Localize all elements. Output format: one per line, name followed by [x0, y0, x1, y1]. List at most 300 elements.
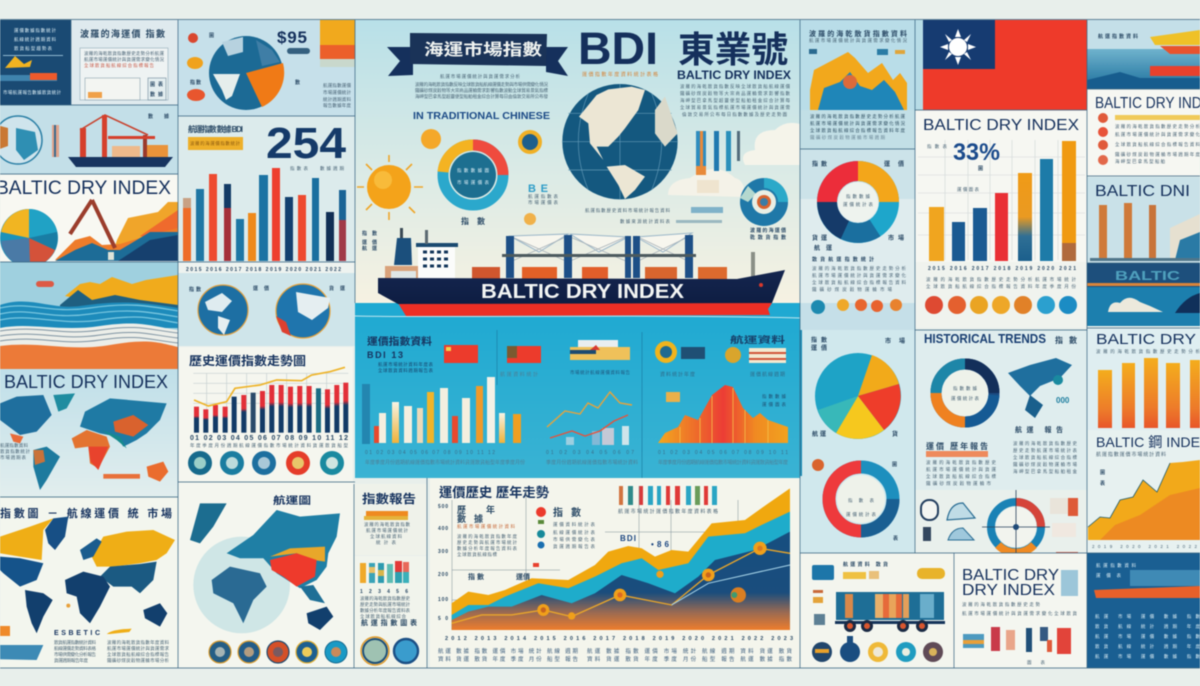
panel: small circle text card: 全球航線資料: [370, 533, 402, 540]
panel: waves and mountains: [0, 262, 178, 369]
panel: globe with orange wedge: 航運指數運價: [323, 82, 352, 89]
panel: center hero: 乾散貨指數: [750, 234, 786, 241]
panel: donut chart and icons: 運價: [884, 160, 904, 168]
panel: report text card top left: 波羅的海乾散貨指數歷史走勢分析航運: [84, 50, 164, 57]
panel: orange bars: 波羅的海乾散貨指數歷史走勢分析: [1096, 348, 1200, 355]
donut chart: 運價統計表: [951, 395, 980, 402]
panel: bar chart 254: 波羅的海運價指數統計: [190, 140, 240, 147]
icons row: [812, 636, 943, 662]
heading: HISTORICAL TRENDS: [924, 331, 1046, 346]
panel: orange bars: BALTIC DRY: [1096, 331, 1196, 348]
panel: baltic text one: 波羅的海乾散貨指數歷史走勢分析: [1115, 123, 1200, 130]
ship cranes: [502, 233, 755, 278]
panel: report text card top left: 全球散貨船航線綜合指標報告: [84, 62, 154, 69]
stacked areas: [452, 488, 790, 630]
panel: center hero: [355, 20, 800, 305]
panel: small stacked bars card: [354, 556, 427, 668]
text block: 全球散貨船航線綜合指標報告資料: [812, 279, 906, 286]
callout percentage: 33%: [953, 139, 1000, 166]
area chart: 01 02 03 04 05 06 07 08 09 10 11: [658, 450, 788, 456]
panel: large area chart: 200: [438, 572, 448, 578]
panel: pie and red blue donut: 貨: [892, 430, 898, 438]
panel: pie and red blue donut: 表: [893, 535, 898, 542]
panel: small stacked bars card: 歷史走勢與航運市場統計: [360, 601, 410, 608]
area chart: 指數數據: [762, 393, 786, 400]
panel: small circle text card: 航運市場運價統計: [366, 527, 408, 534]
text left: 波羅的海乾散貨指數歷史: [926, 459, 996, 466]
panel: report text card top left: [71, 20, 178, 105]
title ribbon: 海運市場指數: [424, 40, 542, 59]
text block under area chart: 全球散貨船航線綜合指標報告資料年度: [810, 127, 906, 134]
icon: gantry crane: [70, 200, 115, 260]
text block under area chart: 波羅的海乾散貨指數歷史走勢分析航運: [810, 113, 906, 120]
panel: historical trends: 指數: [1055, 335, 1077, 345]
panel: small stacked bars card: 航 運 指 數 圖 表: [361, 618, 417, 627]
icon: crane ship: [52, 115, 173, 167]
text lines: 波羅的海乾散貨指數歷史走勢: [962, 601, 1040, 608]
panel: sea with three charts: 資料統計年度: [660, 371, 695, 378]
small map: [1008, 358, 1072, 418]
ship containers: [472, 267, 727, 279]
panel: donut chart and icons: 航運: [814, 244, 832, 252]
gridlines: [452, 486, 790, 630]
heading: 指數圖 － 航線運價 統 市場: [0, 506, 172, 520]
panel: bar and line chart: 年度季度月份週期航線運價指數市場統計資料貨運散貨船型: [190, 442, 348, 449]
panel: sea with three charts: 01 02 03 04 05 06 07 08 09 10 11 12: [365, 450, 495, 456]
icon: target ring chart: [740, 178, 788, 226]
panel: yellow area chart right: 圖: [1100, 470, 1105, 476]
panel: center hero: 數據來源統計資料表: [620, 218, 670, 225]
panel: large area chart: 航運市場統計運價指數年度資料表格: [618, 508, 718, 515]
text right: 歷史走勢航運市場統計表: [1013, 447, 1078, 454]
panel: baltic dry index bar chart 33%: 圖: [978, 166, 983, 172]
icon: globe: [562, 84, 678, 199]
callout BE: 市場運價表: [528, 199, 558, 206]
legend and note: 數據分析年度報告資料表: [457, 545, 518, 552]
panel: yellow area chart right: 2019 2020 2021 2022: [1092, 544, 1197, 549]
panel: baltic dry index mountains: [0, 175, 178, 267]
panel: navy stats card top left: [0, 20, 71, 105]
panel: yellow and navy world map: [0, 498, 178, 668]
panel: orange bars: [1087, 328, 1200, 430]
bar chart: [362, 377, 521, 444]
text right: 海岬型巴拿馬型船舶租金: [1013, 468, 1078, 475]
text left: 運價 歷年報告: [926, 441, 988, 451]
donut chart: 運價統計表: [843, 201, 874, 208]
ship name: BALTIC DRY INDEX: [481, 281, 685, 303]
device icons: [921, 498, 1078, 553]
panel: globe and port crane: [0, 105, 178, 174]
panel: baltic text one: [1087, 90, 1200, 176]
panel: large area chart: 400: [438, 526, 448, 532]
panel: center hero: 指數: [461, 216, 485, 226]
panel: donut chart and icons: 指數: [812, 160, 827, 168]
panel: large area chart: 50: [438, 616, 448, 622]
donut chart: 指數數據圖: [457, 167, 490, 174]
panel: icons row under bars: 2015 2016 2017 2018 2019 2020 2021: [928, 266, 1076, 272]
panel: small stacked bars card: 波羅的海乾散貨指數歷史: [360, 595, 410, 602]
panel: donut chart and icons: 市場: [888, 234, 904, 242]
header icons right: 航運資料: [730, 334, 785, 345]
panel: navy table: 航運 市場 運價 數據 指數: [1095, 633, 1200, 640]
heading left: 航運市場統計資料年度表: [378, 361, 434, 368]
ship illustration: [378, 228, 785, 316]
panel: baltic blue band: [1087, 263, 1200, 326]
panel: sea with three charts: 年度季度月份週期航線運價指數市場統計資料貨運散貨船型年度季度月份: [365, 459, 525, 466]
panel: yellow area chart right: [1087, 430, 1200, 553]
panel: baltic dry index text card: 航運市場運價統計與貨運需求變化全球散貨: [962, 610, 1078, 617]
panel: large area chart: 300: [438, 549, 448, 555]
panel: baltic dry index text card: DRY INDEX: [962, 582, 1055, 599]
x axis labels: 資料 貨運 散貨 年度 季度 月份 船型 報告 航運 數據 指數: [587, 655, 792, 663]
icons row: [811, 299, 902, 314]
text right: 航運 報告: [1015, 425, 1063, 434]
donut chart: 指數數據: [953, 385, 978, 392]
panel: baltic dry index bar chart 33%: 指數表: [927, 143, 948, 150]
text block right: 倫敦交易所公布每日指數數據及歷史走勢圖: [682, 111, 788, 118]
panel: baltic towers: [1087, 177, 1200, 263]
x axis labels: 2012 2013 2014 2015 2016 2017 2018 2019 2020 2021 2022 2023: [445, 636, 793, 642]
panel: globe with orange wedge: [178, 20, 355, 116]
panel: small stacked bars card: 1 2 3 4 5 6: [360, 589, 408, 595]
text block under area chart: 航運市場運價統計與貨運需求變化情況: [810, 120, 906, 127]
globe pie: [209, 36, 284, 110]
legend and note: 波羅的海乾散貨指數年度: [457, 533, 518, 540]
legend and note: [457, 504, 596, 558]
title chinese: 東業號: [678, 29, 788, 70]
panel: globe with orange wedge: 指數: [190, 79, 201, 86]
panel: small circle text card: 統計表: [376, 539, 396, 546]
text right: [1013, 425, 1078, 475]
stacked bars: [360, 561, 409, 583]
heading left: 運價指數資料: [367, 335, 432, 348]
text block: 貨運週期報告年度: [54, 657, 88, 664]
legend and note: 指數: [553, 506, 581, 519]
panel: donut chart and icons: [800, 149, 915, 330]
ship superstructure: [385, 228, 458, 279]
panel: yellow area chart top: [800, 20, 915, 110]
text left: [926, 441, 996, 487]
legend and note: 全球散貨航線指標: [457, 551, 498, 558]
panel: baltic dry index colored world map: 航運指數資料: [0, 442, 28, 449]
panel: pie and red blue donut: 市場: [885, 337, 905, 345]
donut chart: 運價統計表: [846, 511, 876, 518]
panel: small stacked bars card: 數據分析年度報告資料表: [360, 607, 410, 614]
line chart: 01 02 03 04 05 06 07: [546, 450, 634, 456]
heading: BALTIC DRY INDEX: [0, 178, 171, 199]
heading: 航運圖: [273, 494, 311, 507]
value callouts: BDI: [620, 534, 636, 543]
panel: globe and port crane: 數據: [148, 113, 169, 120]
panel: baltic dry index bar chart 33%: [915, 111, 1087, 262]
panel: navy table: 航運指數資料: [1096, 562, 1136, 569]
panel: orange gradient image: [320, 20, 355, 67]
text block left: 航運市場運價統計與貨運需求分析: [440, 73, 520, 80]
panel: report text card top left: 數據: [150, 91, 163, 98]
area chart: 年度季度月份週期航線運價指數市場統計資料貨運散貨船型年度: [658, 459, 788, 466]
panel: baltic text one: 海岬型巴拿馬型船舶: [1115, 158, 1166, 165]
text block: 波羅的海乾散貨指數年度資料: [107, 639, 170, 646]
panel: two globes: 貨運: [329, 285, 345, 292]
value callouts: 指數: [468, 572, 484, 581]
small bars and cloud: [668, 123, 800, 197]
value callouts: [468, 534, 670, 581]
panel: center hero: 運價: [362, 239, 377, 246]
panel: yellow area chart top: 波羅的海乾散貨指數資料: [809, 29, 907, 38]
legend and note: 運價資料統計表: [553, 521, 596, 528]
value callouts: •86: [651, 540, 670, 549]
panel: globe with orange wedge: 數: [295, 79, 300, 86]
donut chart: [936, 364, 994, 422]
text block: 散貨航運指數統計: [812, 256, 874, 263]
donut chart: [443, 145, 503, 205]
text block: 航運市場運價統計與貨運需求變化: [812, 272, 906, 279]
panel: center hero: 指數: [362, 230, 377, 237]
panel: navy table: 散貨 航線 統計 週期 年度: [1095, 623, 1200, 630]
panel: large area chart: 100: [438, 597, 448, 603]
bars: [183, 168, 346, 261]
panel: navy stats card top left: 航線統計週期資料: [14, 36, 56, 43]
panel: bar chart 254: [178, 116, 355, 262]
icons row: [209, 641, 347, 663]
line chart: 季度月份週期航線運價指數市場統計資料: [546, 459, 638, 466]
text block: 散貨航運指數統計資料: [54, 639, 96, 646]
panel: large area chart: [430, 478, 800, 668]
panel: navy table: 散貨 航線 統計 週期 年度: [1095, 643, 1200, 650]
panel: pie and red blue donut: 圖: [892, 462, 897, 468]
icon: small globe: [0, 116, 42, 164]
subtitle in traditional chinese: IN TRADITIONAL CHINESE: [413, 110, 550, 122]
subtitle: BALTIC DRY INDEX: [677, 68, 791, 82]
panel: report text card top left: 波羅的海運價 指數: [80, 28, 165, 39]
title BDI: BDI: [578, 23, 658, 74]
panel: baltic dry index colored world map: 市場週期表: [0, 454, 26, 461]
text block under area chart: 鐵礦砂煤炭穀物運輸市場週期: [810, 134, 886, 141]
panel: two globes: 指數: [189, 286, 201, 293]
panel: pie and red blue donut: 運價: [811, 344, 827, 352]
text block right: 全球貿易景氣指標航運市場運價統計與貨運需: [680, 104, 790, 111]
text block: 全球散貨船航線綜合指標報告: [107, 651, 170, 658]
globe map: [190, 503, 340, 633]
panel: baltic dry index text card: 圖表: [1027, 659, 1046, 666]
panel: report text card top left: 航運市場運價統計與貨運需求變化情況: [84, 56, 164, 63]
panel: icons row under bars: 全球散貨船航線綜合指標報告資料年度季度月份: [926, 283, 1076, 290]
text right: 鐵礦砂煤炭穀物運輸市場: [1013, 461, 1078, 468]
panel: navy table: 航運 市場 運價 數據 指數: [1095, 653, 1200, 660]
icons: [361, 637, 418, 665]
text block right: 海岬型巴拿馬型超靈便型船舶租金綜合計算每: [680, 97, 790, 104]
panel: navy table: 航運 市場 運價 數據 指數: [1095, 613, 1200, 620]
donut chart: [829, 467, 893, 531]
text block left: [415, 73, 548, 100]
callout BE: 航運指數表: [528, 193, 558, 200]
text left: 鐵礦砂煤炭穀物運輸市: [926, 480, 992, 487]
x axis labels: [438, 636, 793, 663]
heading: BALTIC DRY INDEX: [923, 117, 1079, 134]
panel: target and icons: [915, 490, 1087, 556]
legend and note: 數據: [457, 513, 483, 524]
panel: sea with three charts: 市場統計航線運價資料報告: [570, 369, 630, 376]
pie chart: [0, 209, 58, 267]
panel: baltic text one: 鐵礦砂煤炭穀物運輸市場週期年度: [1115, 151, 1200, 158]
x axis labels: 航運 數據 指數 運價 市場 統計 航線 週期: [438, 647, 578, 655]
value callouts: 運價: [516, 572, 530, 581]
right column panels: [1087, 20, 1200, 668]
chart: [193, 367, 348, 433]
panel: center hero: 波羅的海運價: [750, 227, 786, 234]
icon: flag china: [444, 345, 478, 363]
panel: top yellow ship: 航運指數資料: [1098, 33, 1138, 40]
text block: 航線運價走勢資料表格: [54, 645, 96, 652]
panel: sea with three charts: 航運資料統計: [500, 371, 538, 378]
panel: asia focus globe map: [179, 482, 354, 668]
area chart: [810, 52, 907, 110]
panel: bar and line chart: 01 02 03 04 05 06 07 08 09 10 11 12: [190, 435, 348, 442]
panel: historical trends: [915, 330, 1087, 490]
heading left: 全球散貨資料週期報告表: [378, 367, 434, 374]
panel: globe with orange wedge: 統計週期資料: [323, 96, 352, 103]
mountains: [55, 202, 178, 261]
panel: taiwan flag: [915, 20, 1087, 110]
legend and note: 市場供需變化表: [553, 536, 596, 543]
world map: [0, 517, 175, 660]
panel: icons row under bars: 波羅的海乾散貨指數歷史走勢分析航運市場統計: [926, 276, 1076, 283]
panel: sea with three charts: [355, 303, 800, 478]
text block left: 鐵礦砂煤炭穀物等大宗商品運輸需求影響指數波動全球貿易景氣指標: [415, 87, 548, 94]
panel: truck: 航運資料 散貨: [843, 561, 888, 568]
text block: ESBETIC: [54, 630, 100, 637]
text left: 航運市場運價統計與貨運: [926, 466, 996, 473]
heading: 運價歷史 歷年走勢: [439, 485, 549, 500]
legend and note: 歷年: [457, 504, 495, 515]
legend and note: 航線運價統計表: [553, 529, 596, 536]
ship navy hull: [378, 270, 785, 304]
target donut: [982, 490, 1050, 556]
panel: pie and red blue donut: 航運: [812, 430, 826, 438]
panel: globe with orange wedge: 圖: [209, 33, 214, 39]
text block left: 波羅的海乾散貨指數反映全球散貨船航線運價走勢與市場供需變化情況: [415, 81, 548, 88]
callout BE: [528, 183, 558, 206]
panel: baltic text one: 航運市場運價統計與貨運需求變化: [1115, 131, 1200, 138]
panel: small circle text card: 波羅的海乾散貨指數: [364, 521, 410, 528]
text block: 市場供需變化分析報告: [54, 651, 96, 658]
panel: baltic dry index bar chart 33%: 運價圖表: [957, 186, 980, 193]
donut chart: 指數數據: [846, 193, 870, 200]
donut chart: [827, 171, 889, 233]
panel: sea with three charts: 運價航線週期: [750, 371, 785, 378]
panel: pie and red blue donut: [800, 330, 915, 553]
text left: 全球散貨船航線綜合指標: [926, 473, 996, 480]
icon: sun: [357, 155, 423, 220]
panel: center hero: 航運指數歷史資料市場統計報告資料: [585, 207, 670, 214]
icon: compass badge: [518, 130, 542, 154]
big number: 254: [266, 119, 347, 168]
panel: small circle text card: [354, 484, 427, 555]
panel: navy stats card top left: 散貨船型趨勢表: [14, 45, 52, 52]
panel: icons row under bars: [915, 262, 1087, 328]
panel: bar chart 254: 指數表: [290, 165, 308, 172]
heading left: [367, 335, 434, 374]
panel: report text card top left: 圖表: [150, 81, 163, 88]
ship red hull: [398, 303, 772, 316]
panel: two globes: 運價: [253, 285, 269, 292]
callout BE: BE: [528, 183, 548, 195]
text right: 波羅的海乾散貨指數歷史: [1013, 440, 1078, 447]
x axis labels: 資料 貨運 散貨 年度 季度 月份 船型 報告: [438, 655, 578, 663]
panel: navy table: [1087, 553, 1200, 668]
axis labels: 2015 2016 2017 2018 2019 2020 2021 2022: [186, 267, 341, 273]
panel: yellow area chart top: 航運市場運價統計與貨運需求變化情況: [809, 37, 908, 44]
donut chart: 市場運價表: [457, 179, 490, 186]
panel: bar chart 254: 數據週期: [320, 165, 344, 172]
panel: baltic towers: BALTIC DNI: [1095, 183, 1190, 200]
panel: truck: [801, 553, 954, 668]
text block right: [680, 83, 790, 118]
line chart: [546, 392, 638, 466]
icons: [963, 627, 1071, 654]
panel: baltic dry index text card: [954, 553, 1087, 668]
panel: bar and line chart: [179, 347, 353, 482]
panel: donut chart and icons: 貨運: [812, 234, 827, 242]
icon: flag with emblem: [507, 346, 541, 363]
text block: 鐵礦砂煤炭穀物運輸市場分析: [107, 657, 170, 664]
bars: [929, 141, 1076, 261]
area chart: 運價圖表: [762, 401, 786, 408]
heading left: BDI 13: [367, 350, 403, 360]
text right: 全球散貨船航線綜合指標: [1013, 454, 1078, 461]
world map: [0, 393, 168, 490]
text block: 波羅的海乾散貨指數歷史走勢分析: [812, 265, 906, 272]
panel: pie and red blue donut: 指數: [811, 336, 827, 344]
panel: globe with orange wedge: 報告數據年度: [323, 102, 352, 109]
panel: two globes: [178, 262, 355, 346]
donut chart: 指數表: [848, 497, 874, 504]
panel: navy stats card top left: 運價數據指數統計: [14, 27, 56, 34]
text block right: 波羅的海乾散貨指數反映全球散貨船航線運價: [680, 83, 790, 90]
panel: small stacked bars card: 全球散貨船航線綜合: [360, 613, 406, 620]
panel: yellow area chart right: BALTIC 鋼 INDE: [1096, 434, 1200, 450]
icon: truck: [835, 592, 945, 632]
text block: 航運市場運價統計與貨運需求: [107, 645, 170, 652]
x axis labels: 航運 數據 指數 運價 市場 統計 航線 週期 資料 貨運 散貨: [587, 647, 792, 655]
text block: [54, 630, 170, 664]
heading: BALTIC DRY INDEX: [4, 372, 168, 392]
heading: BALTIC DRY: [962, 567, 1059, 584]
panel: navy table: 運價表: [1096, 572, 1122, 579]
panel: top yellow ship: [1087, 20, 1200, 89]
icon: right globe: [276, 284, 330, 338]
text block: [812, 256, 906, 293]
panel: navy stats card top left: 市場航運報告數據散貨統計: [3, 89, 62, 96]
panel: center hero: 航運: [362, 245, 377, 252]
legend and note: 貨運週期報告表: [553, 543, 596, 550]
legend and note: 航運市場運價統計資料: [457, 523, 516, 530]
icon: white sun: [940, 29, 976, 65]
panel: small circle text card: 指數報告: [362, 491, 416, 506]
icons row: [188, 451, 344, 475]
text block left: 海岬型巴拿馬型超靈便型船舶租金綜合計算每日由倫敦交易所公布發: [415, 93, 548, 100]
panel: baltic text one: 全球散貨船航線綜合指標報告資料: [1115, 141, 1200, 148]
heading: 航運指數 數據 BDI: [188, 124, 243, 134]
panel: yellow area chart right: 表: [1100, 480, 1105, 487]
legend and note: 歷史走勢與航運市場統計: [457, 539, 518, 546]
icon circles: [925, 296, 1077, 314]
stripes legend: [619, 486, 717, 505]
text block: 鐵礦砂煤炭穀物運輸市場: [812, 286, 892, 293]
icon: left globe: [198, 285, 248, 335]
small map: 000: [1056, 396, 1070, 405]
title ribbon: [387, 33, 568, 76]
